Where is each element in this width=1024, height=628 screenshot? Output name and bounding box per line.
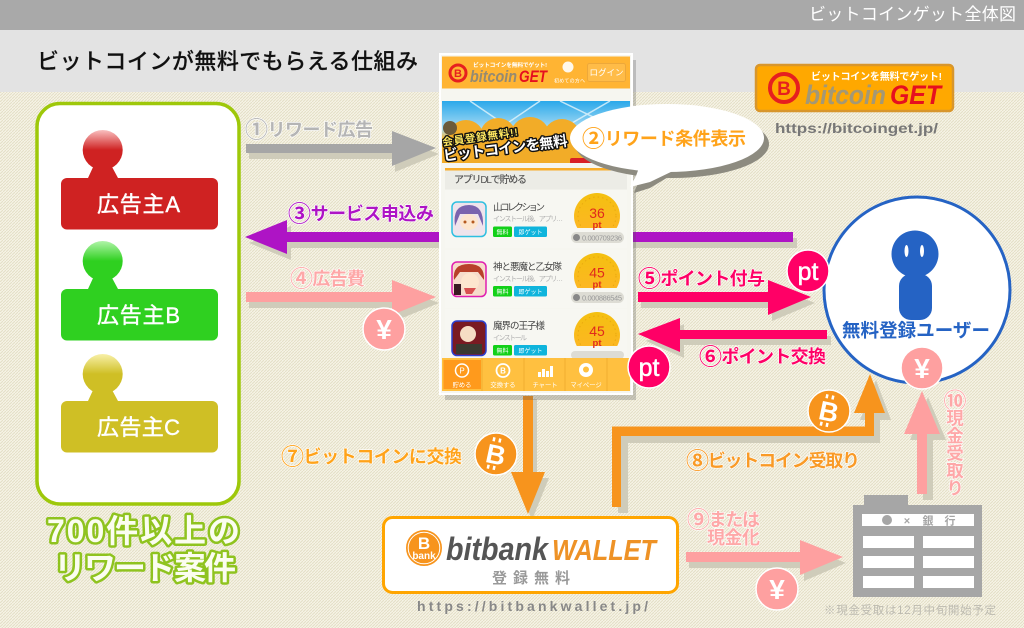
phone shadow	[445, 60, 636, 400]
arrow 3: service application: サービス申込み	[311, 200, 434, 226]
logo: bitcoin GET: GET	[890, 80, 943, 110]
arrow 9: convert to cash: ⑨	[687, 500, 710, 534]
list item: 山コレクション	[451, 193, 624, 243]
arrow 9: convert to cash: 現金化	[707, 524, 760, 550]
yen coin: user: ¥	[914, 353, 930, 384]
list item: 山コレクション: 無料	[496, 228, 509, 236]
panel: bitbank wallet: WALLET	[552, 535, 658, 567]
list item: 山コレクション: 山コレクション	[493, 202, 545, 214]
app header: GET	[519, 67, 548, 86]
yen coin: ad fee: ¥	[376, 314, 392, 345]
arrow 3: service application: ③	[288, 194, 311, 228]
panel: bitbank wallet: 登録無料	[492, 569, 570, 587]
panel: phone app	[440, 54, 636, 400]
arrow 4: ad fee: ④	[290, 260, 313, 294]
arrow 4: ad fee: 広告費	[312, 265, 365, 291]
bitcoin coin: exchange	[475, 433, 517, 475]
pt coin: exchange: pt	[639, 354, 659, 382]
user figure	[892, 230, 938, 320]
caption: 700+ reward offers: リワード案件	[54, 550, 236, 586]
app header: 初めての方へ	[554, 78, 585, 84]
bottom navigation: マイページ	[570, 381, 602, 389]
icon: bitbank logo: bank	[412, 551, 436, 562]
list item: 神と悪魔と乙女隊: 無料	[496, 288, 509, 296]
user circle: 無料登録ユーザー	[842, 317, 990, 343]
app header: B	[454, 68, 462, 80]
advertiser B: 広告主B	[97, 303, 180, 328]
arrow 7: exchange to bitcoin	[511, 396, 549, 520]
advertiser A: 広告主A	[97, 192, 180, 217]
arrow 3: service application	[245, 194, 797, 260]
bottom navigation	[442, 358, 630, 391]
list heading	[445, 168, 627, 190]
list item: 山コレクション: 即ゲット	[518, 228, 543, 236]
app header: ログイン	[589, 68, 624, 78]
list item: 魔界の王子様: 即ゲット	[518, 347, 543, 355]
list item: 神と悪魔と乙女隊: 即ゲット	[518, 288, 543, 296]
advertiser B	[61, 241, 218, 340]
arrow 6: points exchange: ポイント交換	[721, 343, 826, 369]
speech bubble: reward conditions	[570, 104, 769, 193]
bottom navigation: B	[500, 366, 506, 376]
speech bubble: reward conditions: リワード条件表示	[605, 125, 746, 151]
arrow 9: convert to cash	[686, 500, 846, 581]
app header: ビットコインを無料でゲット!	[473, 61, 547, 69]
panel: advertisers	[37, 104, 239, 504]
icon: bank building: 行	[944, 514, 956, 528]
user circle	[824, 197, 1010, 383]
logo: bitcoin GET	[756, 65, 953, 111]
yen coin: cash: ¥	[769, 574, 785, 605]
bitcoin coin: receive: B	[816, 395, 841, 429]
list item: 魔界の王子様: インストール	[493, 334, 527, 342]
logo: bitcoin GET: bitcoin	[805, 80, 886, 110]
url: bitcoinget: https://bitcoinget.jp/	[775, 120, 938, 136]
bitcoin coin: exchange: B	[483, 438, 508, 472]
list item: 魔界の王子様	[451, 312, 624, 358]
caption: 700+ reward offers: 700件以上の	[47, 513, 240, 549]
list item: 神と悪魔と乙女隊: 45	[589, 264, 605, 280]
phone body	[440, 54, 632, 394]
advertiser C	[61, 354, 218, 452]
list item: 山コレクション: インストール後、アプリ…	[493, 214, 563, 223]
icon: bitbank logo: B	[418, 534, 430, 553]
pt coin: grant	[787, 250, 829, 292]
arrow 8: receive bitcoin: ⑧	[686, 442, 709, 476]
label 7: ⑦	[281, 438, 304, 472]
list item: 神と悪魔と乙女隊: 神と悪魔と乙女隊	[493, 261, 562, 273]
bottom navigation: 交換する	[490, 380, 516, 389]
label 7: ビットコインに交換	[304, 443, 462, 469]
logo: bitcoin GET: ビットコインを無料でゲット!	[811, 70, 942, 83]
banner: ビットコインを無料	[442, 132, 569, 165]
top bar label: ビットコインゲット全体図	[809, 5, 1016, 24]
yen coin: user	[901, 347, 943, 389]
yen coin: ad fee	[363, 308, 405, 350]
yen coin: cash	[756, 568, 798, 610]
logo: bitcoin GET: B	[777, 79, 791, 100]
list item: 神と悪魔と乙女隊: 0.000886545	[582, 293, 622, 302]
arrow 6: points exchange: ⑥	[699, 338, 722, 372]
list item: 山コレクション: 0.000709236	[582, 233, 622, 242]
bottom navigation: P	[459, 366, 465, 376]
arrow 4: ad fee	[246, 260, 439, 321]
bottom navigation: チャート	[532, 381, 558, 389]
icon: bank building: ×	[904, 516, 910, 528]
arrow 6: points exchange	[638, 318, 831, 372]
banner: 会員登録無料!!	[442, 126, 519, 149]
arrow 1: reward ad	[245, 110, 439, 172]
caption: 700+ reward offers	[47, 513, 240, 586]
panel: bitbank wallet: bitbank	[446, 531, 550, 567]
url: bitbankwallet: https://bitbankwallet.jp/	[417, 598, 648, 614]
pt coin: exchange	[628, 346, 670, 388]
arrow 1: reward ad: ①	[245, 110, 268, 144]
arrow 5: points granted: ポイント付与	[660, 265, 765, 291]
bottom navigation: 貯める	[453, 381, 471, 389]
icon: bitbank logo	[406, 530, 442, 566]
arrow 10: cash receipt	[904, 382, 968, 500]
list item: 神と悪魔と乙女隊: pt	[593, 280, 602, 290]
arrow 10: cash receipt: ⑩	[944, 382, 966, 416]
title band	[0, 30, 1024, 92]
arrow 10: cash receipt: 現金受取り	[942, 409, 968, 496]
advertiser A	[61, 130, 218, 230]
arrow 8: receive bitcoin	[612, 374, 891, 513]
arrow 9: convert to cash: または	[709, 506, 760, 532]
arrow 1: reward ad: リワード広告	[268, 116, 373, 142]
banner	[442, 101, 630, 165]
arrow 5: points granted	[638, 260, 815, 321]
arrow 5: points granted: ⑤	[638, 260, 661, 294]
app header: bitcoin	[470, 67, 517, 86]
list item: 山コレクション: pt	[593, 220, 602, 231]
list item: 山コレクション: 36	[589, 205, 605, 221]
note: ※現金受取は12月中旬開始予定	[824, 603, 996, 617]
list item: 魔界の王子様: pt	[593, 338, 602, 349]
title: ビットコインが無料でもらえる仕組み	[37, 49, 418, 74]
list item: 魔界の王子様: 無料	[496, 347, 509, 355]
icon: bank building	[853, 495, 982, 597]
top bar	[0, 0, 1024, 30]
list item: 神と悪魔と乙女隊: インストール後、アプリ…	[493, 274, 563, 283]
app header	[442, 56, 630, 88]
list item: 神と悪魔と乙女隊	[451, 253, 624, 303]
speech bubble: reward conditions: ②	[582, 120, 605, 154]
arrow 8: receive bitcoin: ビットコイン受取り	[708, 447, 860, 473]
advertiser C: 広告主C	[97, 415, 180, 440]
list heading: アプリDLで貯める	[454, 174, 527, 186]
panel: bitbank wallet	[384, 518, 678, 592]
icon: bank building: 銀	[922, 514, 934, 528]
list item: 魔界の王子様: 45	[589, 323, 605, 339]
pt coin: grant: pt	[798, 258, 818, 286]
bitcoin coin: receive	[808, 390, 850, 432]
list item: 魔界の王子様: 魔界の王子様	[493, 320, 545, 332]
